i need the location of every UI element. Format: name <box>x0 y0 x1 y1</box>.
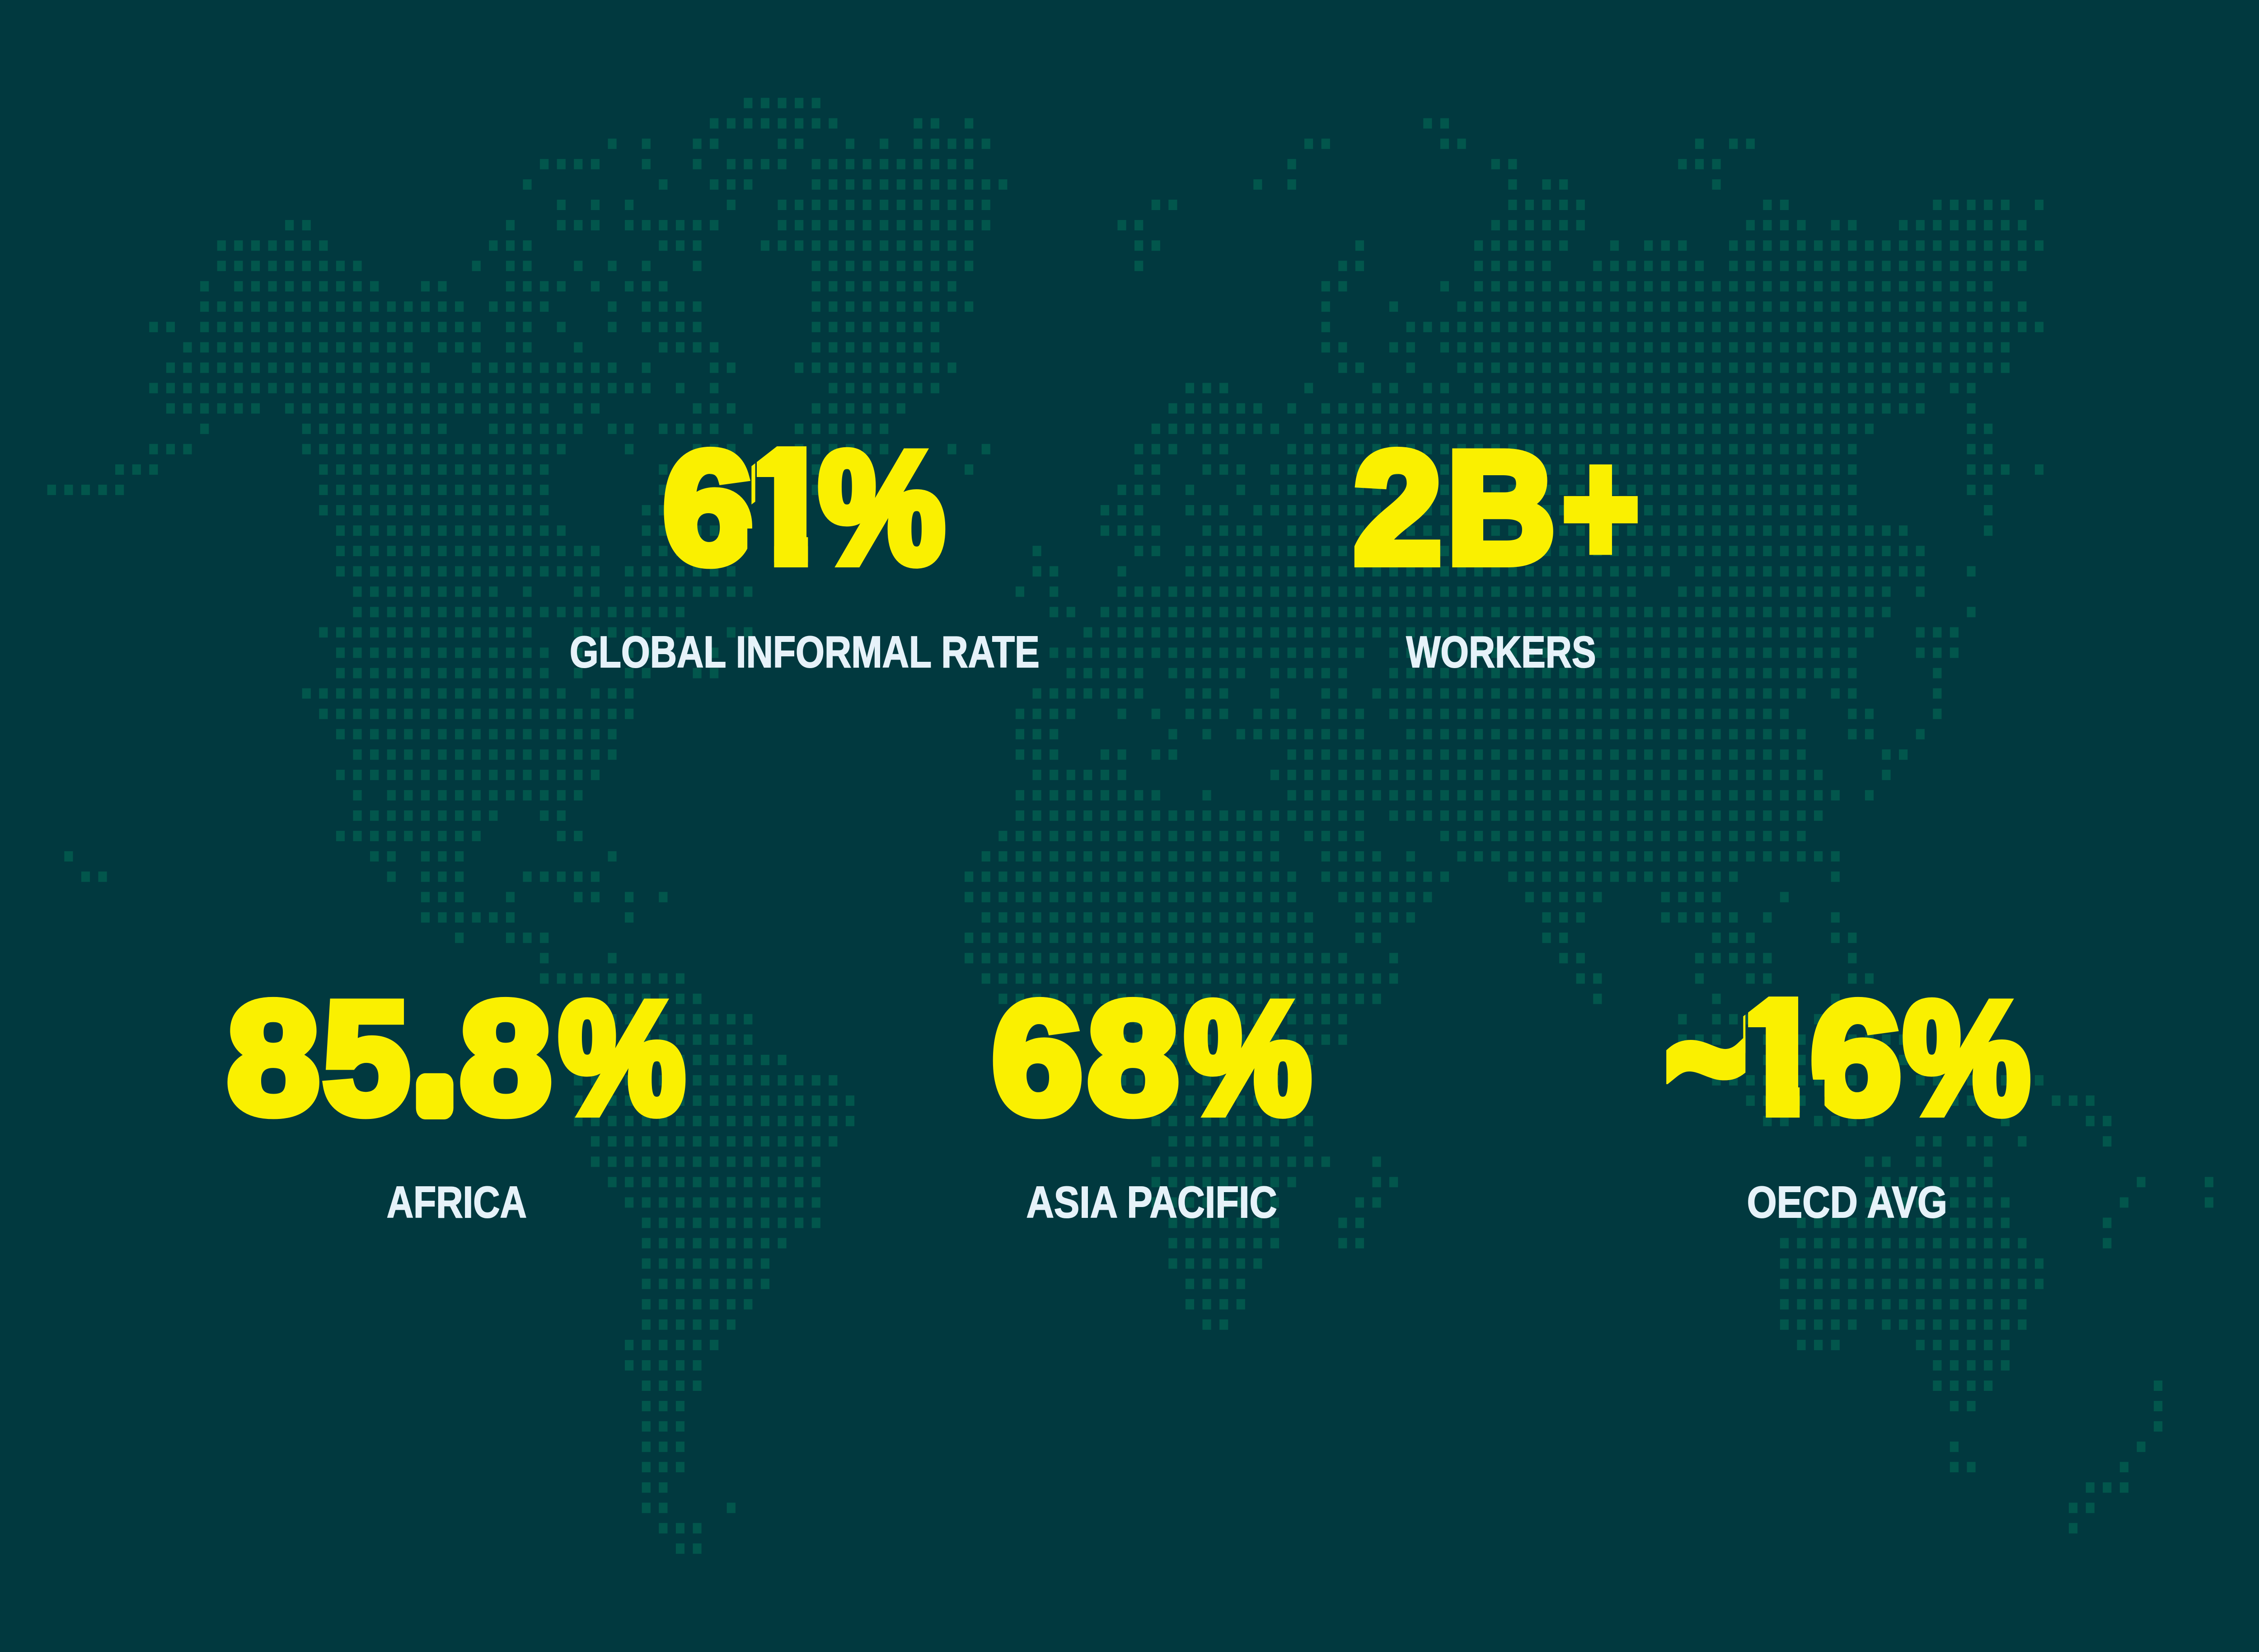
label: Asia Pacific: ASIA PACIFIC <box>1026 1178 1277 1227</box>
stat: Asia Pacific <box>992 970 1311 1227</box>
value: ~16%: 6 <box>1811 970 1901 1147</box>
stat: Africa <box>227 965 685 1227</box>
label: global informal rate: GLOBAL INFORMAL RATE <box>570 627 1040 677</box>
value: 68%: % <box>1185 970 1311 1147</box>
value: 85.8%: 5 <box>323 970 410 1147</box>
value: ~16%: 1 <box>1742 970 1815 1147</box>
value: 2B+: 2 <box>1354 420 1442 596</box>
value: 68%: 8 <box>1088 970 1178 1147</box>
value: 2B+: B <box>1447 420 1556 596</box>
stat: OECD average <box>1666 997 2030 1218</box>
label: Africa: AFRICA <box>387 1178 527 1227</box>
value: ~16%: ~ <box>1668 970 1747 1147</box>
value: 61%: % <box>819 420 945 596</box>
value: 68%: 6 <box>992 970 1083 1147</box>
value: 85.8%: . <box>417 965 453 1142</box>
label: OECD average: OECD AVG <box>1747 1178 1947 1227</box>
value: 85.8%: 8 <box>460 970 551 1147</box>
value: 2B+: + <box>1562 420 1639 596</box>
stat: global informal rate <box>570 420 1040 677</box>
value: 61%: 1 <box>750 420 824 596</box>
value: 85.8%: 8 <box>227 970 319 1147</box>
value: 85.8%: % <box>559 970 685 1147</box>
value: 61%: 6 <box>663 420 753 596</box>
label: workers: WORKERS <box>1406 627 1596 677</box>
stat: workers <box>1354 420 1639 677</box>
value: ~16%: % <box>1903 970 2030 1147</box>
